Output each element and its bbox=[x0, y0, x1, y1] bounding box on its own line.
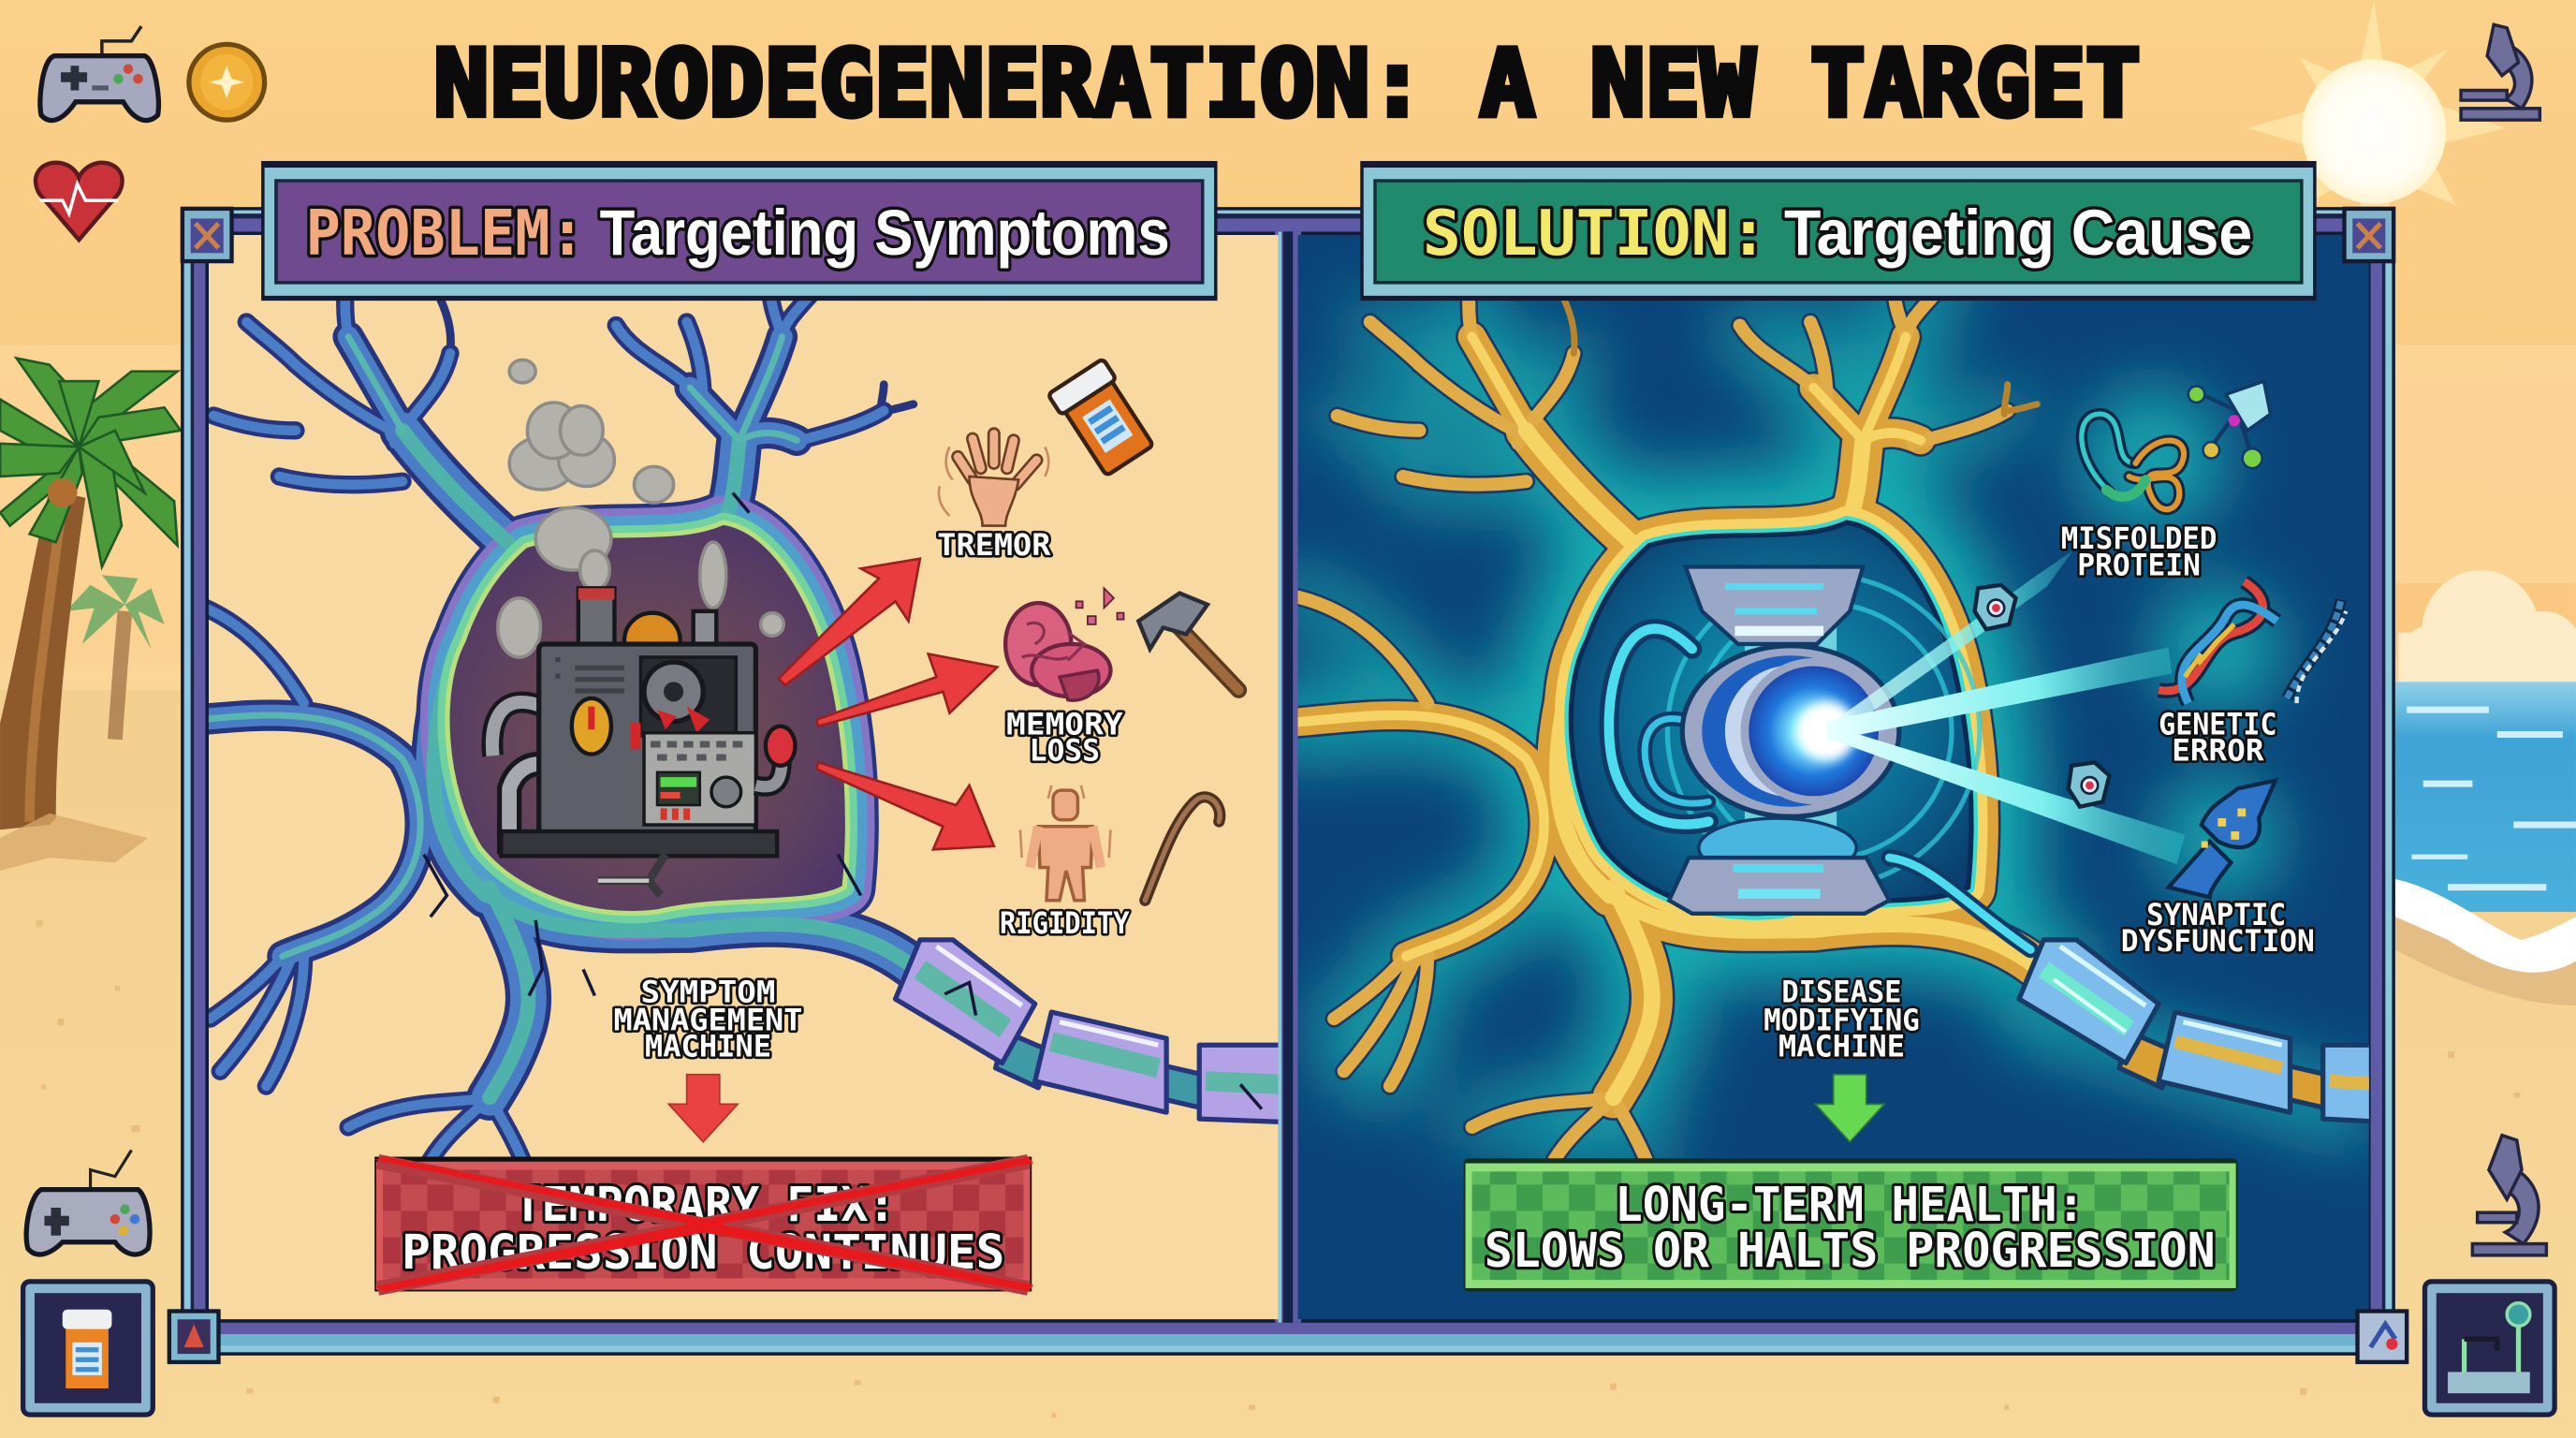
banner: temporary fix: TEMPORARY FIX: bbox=[514, 1178, 896, 1233]
palm trees bbox=[0, 359, 181, 871]
label: symptom management machine: MANAGEMENT bbox=[614, 1004, 802, 1037]
header: problem: PROBLEM: bbox=[305, 197, 585, 270]
banner: long-term health: SLOWS OR HALTS PROGRESSION bbox=[1485, 1224, 2216, 1279]
icon: trembling hand bbox=[939, 433, 1048, 526]
icon: pill bottle bbox=[1047, 359, 1158, 478]
therapy beams bbox=[1827, 550, 2185, 864]
energy rings bbox=[1667, 575, 1980, 888]
banner: long-term health bbox=[1464, 1158, 2237, 1291]
sea and shoreline bbox=[2395, 682, 2576, 1005]
base bbox=[1699, 818, 1856, 877]
icon: microscope top bbox=[2461, 24, 2539, 120]
icon box: pill bottle bbox=[23, 1282, 153, 1415]
panel: solution (right) bbox=[1288, 235, 2389, 1319]
label: synaptic dysfunction bbox=[2121, 899, 2315, 959]
title: NEURODEGENERATION: A NEW TARGET bbox=[433, 31, 2141, 138]
sun bbox=[2247, 0, 2505, 246]
cloud bbox=[2398, 570, 2576, 695]
icon: rigid body bbox=[1020, 785, 1110, 901]
header: problem: Targeting Symptoms bbox=[600, 197, 1170, 269]
smoke bbox=[498, 360, 783, 657]
label: rigidity: RIGIDITY bbox=[1000, 907, 1130, 941]
myelin sheaths bbox=[896, 940, 1290, 1123]
icon: nanobot upper bbox=[1975, 585, 2015, 629]
label: genetic error: GENETIC bbox=[2159, 708, 2277, 741]
label: synaptic dysfunction: DYSFUNCTION bbox=[2121, 925, 2315, 959]
icon: cane bbox=[1145, 797, 1220, 901]
glow behind neuron bbox=[1288, 279, 2043, 1160]
icon: game controller top bbox=[40, 26, 158, 121]
label: misfolded protein: MISFOLDED bbox=[2061, 522, 2217, 556]
icon: misfolded protein bbox=[2082, 414, 2184, 509]
reactor shell bbox=[1682, 646, 1899, 816]
icon: heart bbox=[36, 163, 123, 240]
symptom arrows bbox=[779, 559, 997, 849]
banner: long-term health: LONG-TERM HEALTH: bbox=[1615, 1178, 2085, 1233]
label: disease modifying machine: MACHINE bbox=[1778, 1030, 1905, 1064]
icon: synapse bbox=[2169, 781, 2276, 897]
icon: coin bbox=[189, 44, 265, 120]
frame bbox=[181, 207, 2395, 1356]
label: symptom management machine: SYMPTOM bbox=[641, 976, 775, 1010]
icon: molecule bbox=[2188, 381, 2271, 468]
label: memory loss: LOSS bbox=[1030, 735, 1100, 769]
header: solution: Targeting Cause bbox=[1784, 197, 2252, 269]
icon: dna helix bbox=[2159, 581, 2277, 703]
label: disease modifying machine: MODIFYING bbox=[1764, 1004, 1920, 1037]
label: misfolded protein bbox=[2061, 522, 2217, 582]
corner: top right bbox=[2344, 209, 2393, 261]
glow behind targets bbox=[2004, 386, 2365, 1151]
label: symptom management machine bbox=[614, 976, 802, 1064]
banner: temporary fix bbox=[374, 1157, 1033, 1291]
healthy neuron bbox=[1288, 279, 2389, 1160]
myelin sheaths bbox=[2019, 940, 2389, 1123]
light column bbox=[1745, 621, 1837, 868]
label: genetic error: ERROR bbox=[2172, 735, 2265, 769]
banner: temporary fix: PROGRESSION CONTINUES bbox=[402, 1225, 1004, 1281]
label: disease modifying machine: DISEASE bbox=[1781, 976, 1902, 1010]
top cap bbox=[1686, 566, 1863, 644]
corner: bottom right bbox=[2358, 1312, 2407, 1362]
corner: top left bbox=[183, 209, 232, 261]
sand speckles bbox=[37, 920, 2520, 1418]
large palm bbox=[0, 490, 85, 829]
damaged neuron bbox=[165, 279, 1290, 1160]
arrow: down red bbox=[668, 1075, 738, 1142]
label: tremor: TREMOR bbox=[937, 529, 1051, 563]
disease modifying machine bbox=[1609, 566, 2030, 949]
icon: nanobot lower bbox=[2069, 762, 2110, 807]
header: solution bbox=[1360, 161, 2317, 301]
label: disease modifying machine bbox=[1764, 976, 1920, 1064]
icon box: lab equipment bbox=[2424, 1282, 2554, 1415]
coolant pipes bbox=[1609, 629, 2030, 949]
small palm bbox=[66, 575, 165, 740]
header: solution: SOLUTION: bbox=[1423, 197, 1767, 270]
label: genetic error bbox=[2159, 708, 2277, 769]
label: misfolded protein: PROTEIN bbox=[2077, 549, 2201, 582]
icon: game controller bottom bbox=[26, 1151, 150, 1255]
label: memory loss: MEMORY bbox=[1006, 708, 1123, 741]
corner: bottom left bbox=[169, 1312, 218, 1362]
icon: small dna bbox=[2287, 600, 2346, 703]
arrow: down green bbox=[1815, 1075, 1884, 1142]
label: symptom management machine: MACHINE bbox=[645, 1030, 771, 1064]
panel: problem (left) bbox=[165, 235, 1290, 1319]
broken machine bbox=[492, 588, 795, 895]
label: memory loss bbox=[1006, 708, 1123, 769]
icon: hammer bbox=[1138, 594, 1238, 690]
icon: crumbling brain bbox=[1005, 588, 1123, 700]
red cross-out bbox=[374, 1157, 1033, 1291]
icon: microscope bottom bbox=[2472, 1136, 2546, 1255]
label: synaptic dysfunction: SYNAPTIC bbox=[2146, 899, 2286, 932]
cracks bbox=[424, 493, 861, 996]
header: problem bbox=[261, 161, 1218, 301]
